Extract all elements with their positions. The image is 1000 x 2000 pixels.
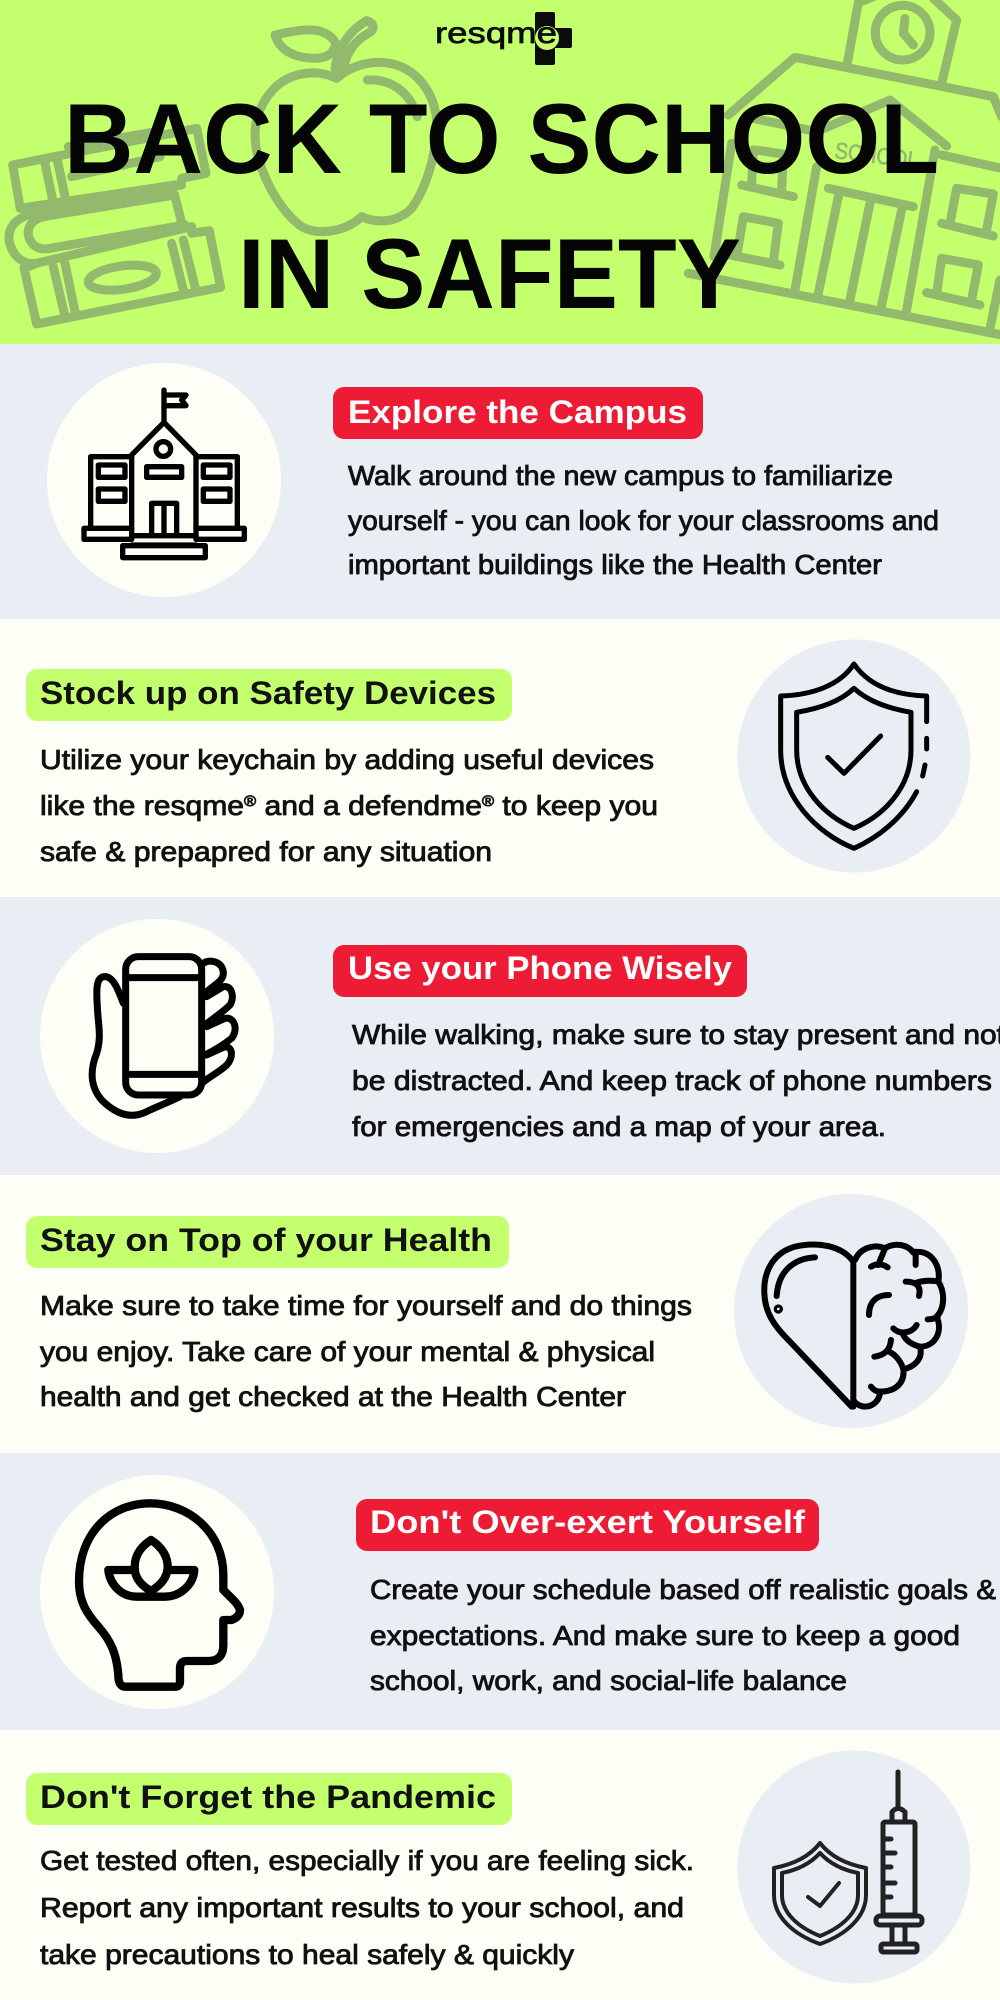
text block: safe & prepapred for any situation [40,836,492,867]
icon: apple [255,21,437,232]
text block: to keep you [494,790,658,821]
heading: stay on top: Stay on Top of your Health [40,1222,492,1258]
text block: for emergencies and a map of your area. [352,1111,886,1142]
text block: Report any important results to your school, and [40,1892,684,1923]
text block: be distracted. And keep track of phone numbers [352,1065,992,1096]
panel: stay on top of your health [0,1175,1000,1453]
icon: stack of books [9,128,221,324]
text block: and a defendme [256,790,482,821]
text block: health and get checked at the Health Center [40,1381,626,1412]
title: IN SAFETY [238,218,741,329]
icon: school building [688,0,1000,335]
header panel [0,0,1000,344]
heading: don't over-exert [356,1499,819,1551]
text block: expectations. And make sure to keep a good [370,1620,960,1651]
text block [348,460,939,580]
text block: take precautions to heal safely & quickly [40,1939,574,1970]
heading: stock up: Stock up on Safety Devices [40,675,496,711]
icon: hand holding phone [92,957,235,1115]
text block: Create your schedule based off realistic goals & [370,1574,996,1605]
icon: school [84,390,244,558]
text block: school, work, and social-life balance [370,1665,847,1696]
text block: Make sure to take time for yourself and do things [40,1290,692,1321]
heading: use your phone wisely [333,945,747,997]
heading: explore the campus: Explore the Campus [348,394,687,430]
text block [370,1574,996,1696]
panel: stock up on safety devices [0,619,1000,897]
heading: don't forget: Don't Forget the Pandemic [40,1779,496,1815]
text block: While walking, make sure to stay present and not [352,1019,1000,1050]
heading: don't forget [26,1773,512,1825]
heading: explore the campus [333,387,703,439]
text block [40,744,658,867]
text block: you enjoy. Take care of your mental & physical [40,1336,655,1367]
text block: ® [482,793,494,810]
logo: resqme [435,12,572,65]
text block [40,1290,692,1412]
text block: Walk around the new campus to familiarize [348,460,893,491]
icon: shield with check [781,664,927,848]
title [64,83,939,329]
text block [40,1845,694,1970]
text block: yourself - you can look for your classrooms and [348,505,939,536]
panel: don't over-exert yourself [0,1453,1000,1730]
panel: don't forget the pandemic [0,1730,1000,2000]
text block: like the resqme [40,790,226,821]
text block: important buildings like the Health Center [348,549,882,580]
icon: syringe [876,1772,922,1952]
panel: use your phone wisely [0,897,1000,1175]
text block [352,1019,1000,1142]
heading: stay on top [26,1216,509,1268]
icon: heart and brain [764,1245,943,1407]
heading: use your phone wisely: Use your Phone Wisely [348,950,732,986]
text block: ® [244,793,256,810]
heading: stock up [26,669,512,721]
school sign text: SCHOOL [833,137,920,173]
panel: explore the campus [0,344,1000,619]
icon: small shield with check [774,1843,866,1944]
text block: Utilize your keychain by adding useful devices [40,744,654,775]
title: BACK TO SCHOOL [64,83,939,194]
text block: Get tested often, especially if you are feeling sick. [40,1845,694,1876]
logo: resqme: resqme [435,17,557,50]
heading: don't over-exert: Don't Over-exert Yourself [370,1504,805,1540]
icon: head with lotus [79,1503,240,1687]
